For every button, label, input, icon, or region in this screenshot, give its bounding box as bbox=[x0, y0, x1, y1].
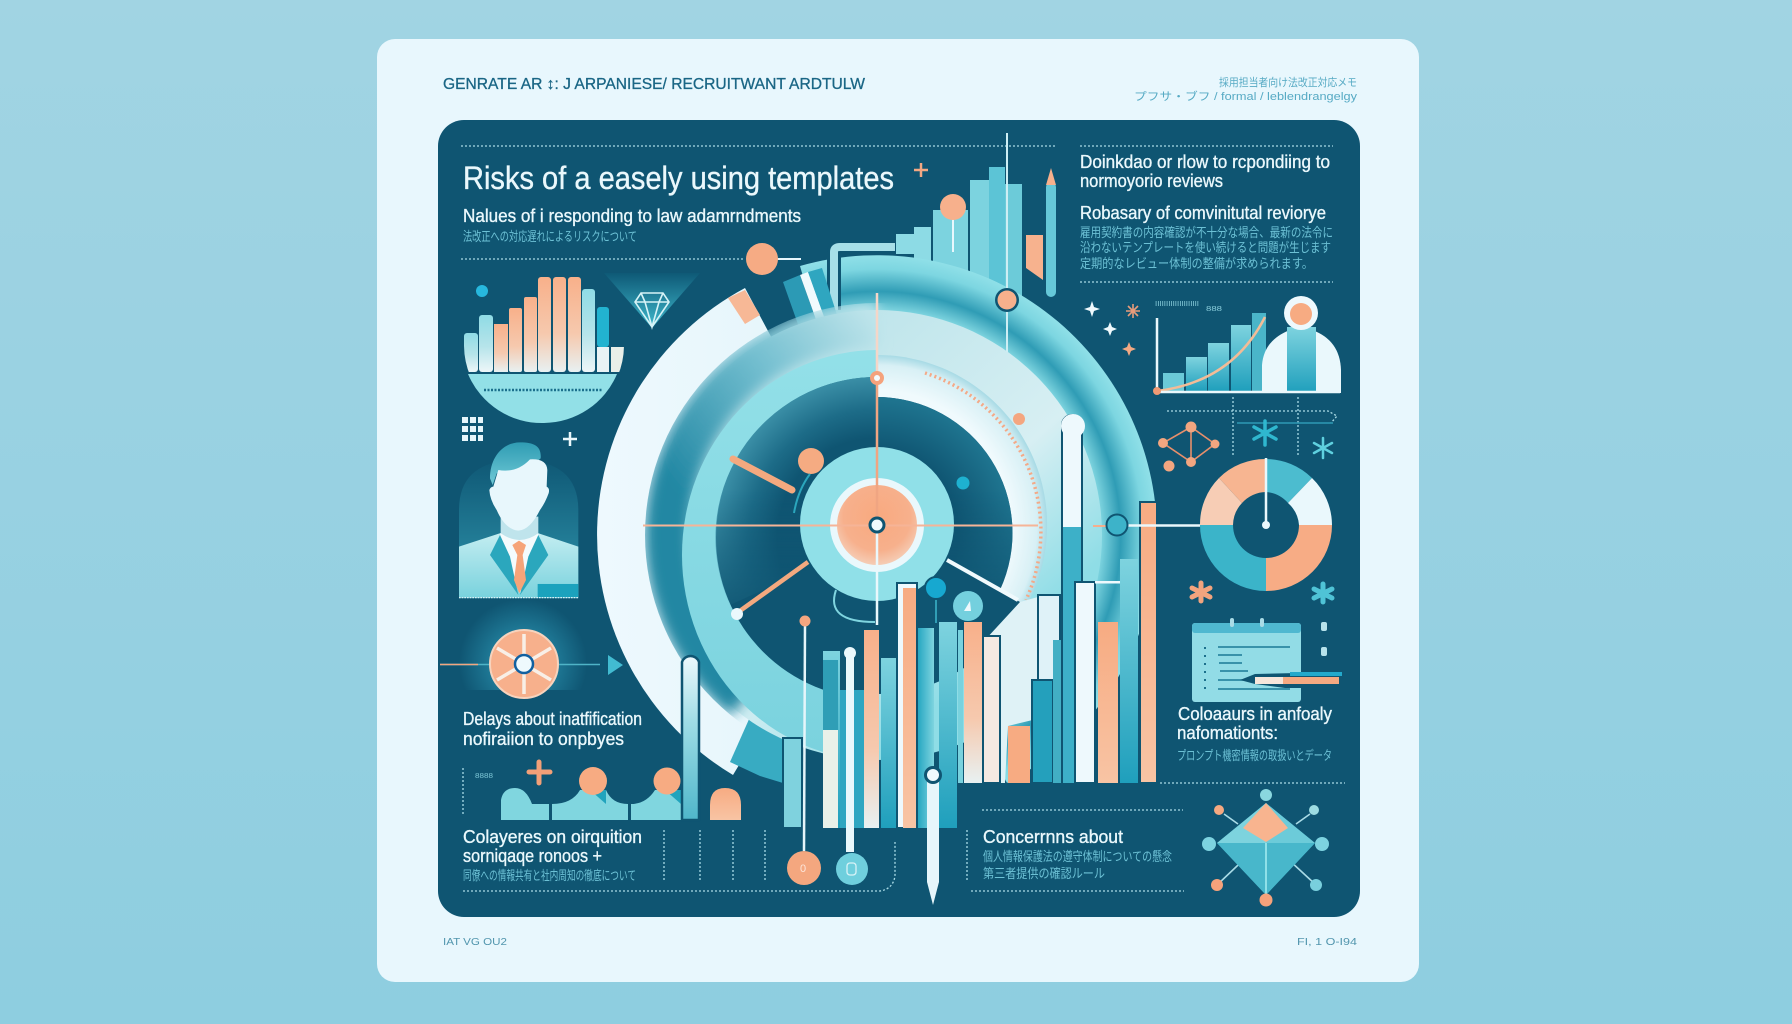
peach block bbox=[728, 290, 760, 324]
checklist card with pen bbox=[1192, 618, 1343, 702]
hatched sector right bbox=[877, 397, 1013, 590]
tiny chart label bbox=[1155, 301, 1222, 313]
text: colleagues bbox=[463, 827, 642, 883]
right area sparkles bbox=[1084, 301, 1140, 356]
text block right top: Robasary of comvinitutal reviorye bbox=[1080, 203, 1326, 223]
text: colleagues: 同僚への情報共有と社内周知の徹底について bbox=[463, 868, 636, 883]
lower bar forest bbox=[783, 414, 1157, 828]
gem triangle bbox=[604, 273, 700, 328]
concentric radial diagram bbox=[597, 247, 1157, 783]
cyan asterisks bbox=[1254, 421, 1332, 458]
top-right mini bar chart bbox=[896, 167, 1043, 304]
subheading left bbox=[463, 206, 801, 244]
connector node bbox=[1093, 514, 1128, 536]
diamond network bbox=[1202, 789, 1329, 906]
text: colleagues informal: Coloaaurs in anfoaly bbox=[1178, 704, 1332, 724]
header note: プフサ・ブフ / formal / leblendrangelgy bbox=[1134, 89, 1358, 103]
bars right group bbox=[1008, 414, 1157, 783]
text block right top: 沿わないテンプレートを使い続けると問題が生じます bbox=[1080, 240, 1331, 255]
right light band bbox=[877, 355, 1047, 607]
grid icon bbox=[462, 417, 483, 441]
pin stems with circles bbox=[787, 616, 868, 885]
bubble pins on bars bbox=[925, 577, 983, 623]
text: delays notification: nofiraiion to onpbyes bbox=[463, 729, 624, 749]
text: delays notification: Delays about inatfification bbox=[463, 709, 642, 729]
footer left: IAT VG OU2 bbox=[443, 937, 508, 948]
tiny chart label: 888 bbox=[1206, 306, 1222, 313]
header note: 採用担当者向け法改正対応メモ bbox=[1219, 75, 1357, 89]
tiny label: 8888 bbox=[475, 773, 493, 780]
outer cyan arc bbox=[800, 255, 1157, 783]
plus white bbox=[563, 432, 577, 446]
peach callout top bbox=[746, 243, 801, 275]
text: concerns about: 第三者提供の確認ルール bbox=[983, 866, 1105, 881]
subheading left: Nalues of i responding to law adamrndments bbox=[463, 206, 801, 226]
text block right top: Doinkdao or rlow to rcpondiing to bbox=[1080, 152, 1330, 172]
main dark panel bbox=[438, 120, 1360, 917]
text block right top: 雇用契約書の内容確認が不十分な場合、最新の法令に bbox=[1080, 225, 1333, 240]
text: concerns about bbox=[983, 827, 1172, 881]
text: colleagues: Colayeres on oirquition bbox=[463, 827, 642, 847]
dashed connector bbox=[1167, 397, 1337, 457]
people silhouettes row bbox=[501, 767, 741, 820]
person portrait bbox=[459, 442, 578, 598]
text block right top: normoyorio reviews bbox=[1080, 171, 1223, 191]
gear wheel with arrow bbox=[440, 606, 623, 699]
outer white arc bbox=[597, 288, 877, 775]
needle bbox=[926, 768, 940, 905]
hatched sector left bbox=[715, 377, 877, 605]
dark disc bbox=[716, 377, 877, 699]
text: colleagues informal: nafomationts: bbox=[1177, 723, 1278, 743]
subheading left: 法改正への対応遅れによるリスクについて bbox=[463, 229, 637, 244]
crosshair bbox=[643, 293, 1038, 625]
tall pill bbox=[682, 656, 699, 820]
spokes bbox=[731, 413, 1025, 622]
text: delays notification bbox=[463, 709, 642, 749]
vertical line with peach node bbox=[995, 133, 1019, 352]
bars bottom-left group bbox=[783, 583, 1000, 828]
teal speckled left ring bbox=[667, 325, 877, 698]
medium disc bbox=[652, 310, 1102, 760]
text block right top bbox=[1080, 152, 1333, 271]
plus peach bbox=[914, 163, 928, 177]
peach dotted arc bbox=[925, 373, 1041, 600]
inner cyan band bbox=[682, 350, 877, 760]
tiny chart label: IIIIIIIIIIIIIIIIIIII bbox=[1155, 301, 1199, 308]
network icon bbox=[1158, 422, 1220, 472]
footer right: FI, 1 O-I94 bbox=[1297, 937, 1358, 948]
pale backdrop bbox=[985, 595, 1045, 783]
center cyan disc bbox=[800, 447, 954, 601]
card bbox=[377, 39, 1419, 982]
lower asterisks bbox=[1192, 583, 1332, 602]
white ring and peach core bbox=[830, 478, 924, 572]
text: colleagues: sorniqaqe ronoos + bbox=[463, 846, 602, 866]
pin stems with circles: 0 bbox=[800, 863, 806, 875]
main title: Risks of a easely using templates bbox=[463, 160, 894, 196]
left bowl bar chart bbox=[464, 277, 624, 423]
text block right top: 定期的なレビュー体制の整備が求められます。 bbox=[1080, 256, 1313, 271]
small side glyphs bbox=[1321, 622, 1327, 656]
text: concerns about: Concerrnns about bbox=[983, 827, 1123, 847]
arrow upward bbox=[1046, 168, 1056, 297]
peach pin bbox=[940, 194, 966, 252]
stripes and pipe bbox=[783, 247, 895, 330]
header title: GENRATE AR ↕: J ARPANIESE/ RECRUITWANT ARDTULW bbox=[443, 76, 866, 93]
donut chart bbox=[1128, 458, 1332, 591]
header note bbox=[1134, 75, 1358, 103]
text: colleagues informal bbox=[1177, 704, 1332, 763]
plus peach lower bbox=[529, 762, 550, 783]
text: concerns about: 個人情報保護法の遵守体制についての懸念 bbox=[983, 849, 1172, 864]
divider dashes bbox=[461, 146, 1345, 891]
text: colleagues informal: プロンプト機密情報の取扱いとデータ bbox=[1177, 748, 1332, 763]
teal wedge lower left bbox=[730, 717, 783, 783]
right growth chart with person bbox=[1153, 296, 1341, 395]
